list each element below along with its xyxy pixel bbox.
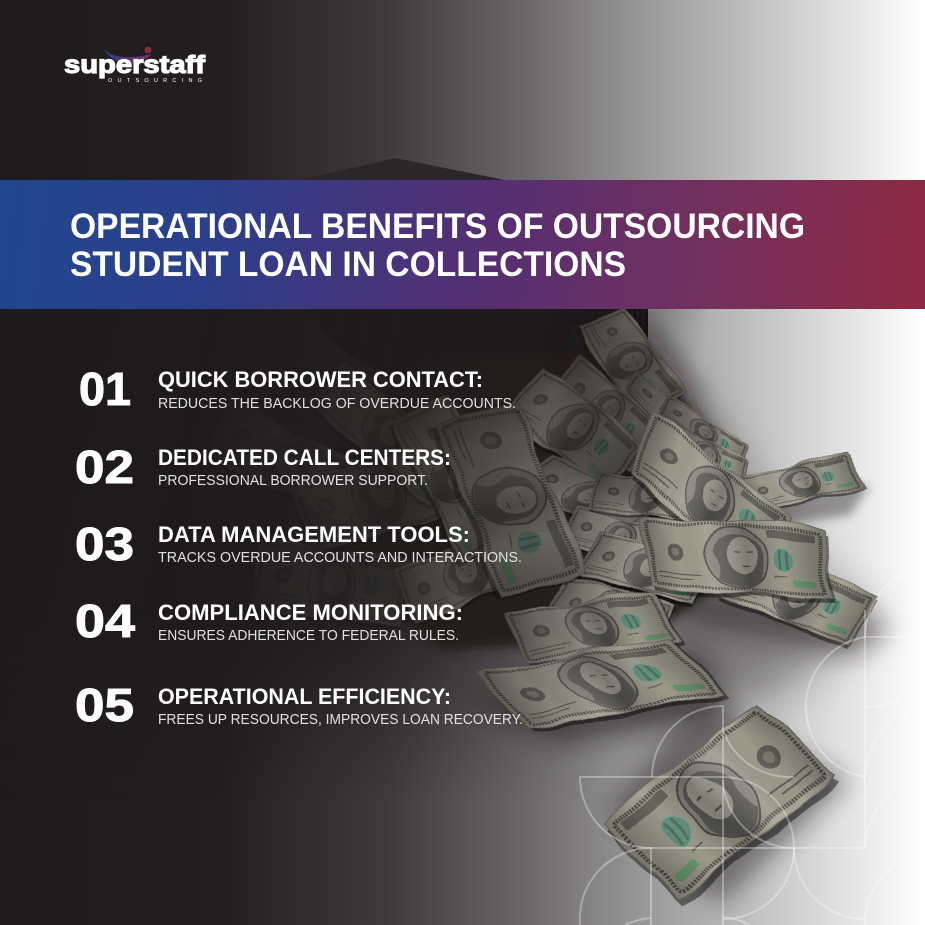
list item 03: 03: [75, 518, 134, 570]
list item 01: QUICK BORROWER CONTACT:: [158, 367, 483, 392]
list item 04: 04: [75, 595, 135, 647]
logo: superstaff: [64, 47, 206, 84]
logo: superstaff: superstaff: [64, 51, 206, 79]
list item 03: DATA MANAGEMENT TOOLS:: [158, 522, 470, 547]
list item 05: [75, 679, 523, 731]
list item 01: [79, 363, 516, 415]
list item 03: TRACKS OVERDUE ACCOUNTS AND INTERACTIONS.: [158, 550, 522, 566]
list item 02: 02: [75, 441, 134, 493]
list item 04: ENSURES ADHERENCE TO FEDERAL RULES.: [158, 628, 459, 644]
list item 05: FREES UP RESOURCES, IMPROVES LOAN RECOVERY.: [158, 712, 523, 728]
list item 05: OPERATIONAL EFFICIENCY:: [158, 684, 451, 709]
icon: tassel: [617, 309, 648, 344]
title: STUDENT LOAN IN COLLECTIONS: [70, 245, 626, 284]
list item 04: COMPLIANCE MONITORING:: [158, 600, 463, 625]
logo: superstaff: OUTSOURCING: [108, 78, 202, 84]
list item 02: [75, 441, 451, 493]
list item 05: 05: [75, 679, 134, 731]
list item 01: 01: [79, 363, 131, 415]
list item 02: DEDICATED CALL CENTERS:: [158, 445, 451, 470]
dark left fade over pile: [206, 309, 700, 754]
list item 03: [75, 518, 522, 570]
money pile photo: [200, 304, 890, 909]
list item 01: REDUCES THE BACKLOG OF OVERDUE ACCOUNTS.: [158, 396, 516, 412]
graduation cap silhouette: [300, 158, 648, 386]
banner: [0, 180, 925, 309]
list item 02: PROFESSIONAL BORROWER SUPPORT.: [158, 473, 428, 489]
geometric outline pattern: [580, 566, 925, 925]
title: [70, 207, 805, 284]
list item 04: [75, 595, 463, 647]
title: OPERATIONAL BENEFITS OF OUTSOURCING: [70, 207, 805, 246]
